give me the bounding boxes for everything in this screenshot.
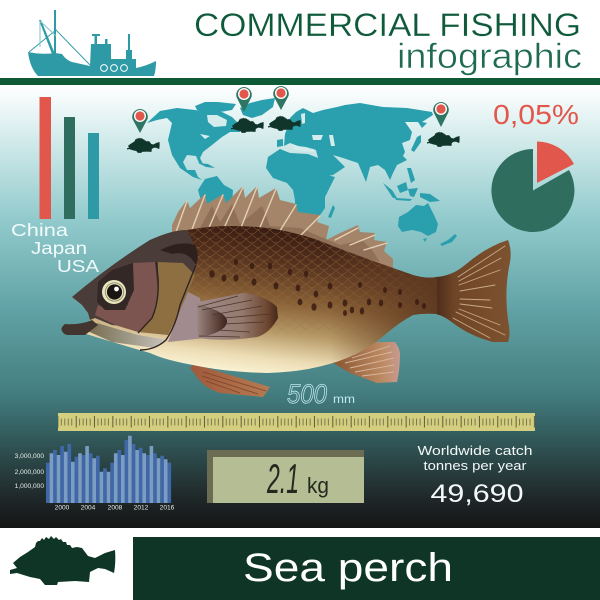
fish body [72,226,437,373]
Europe and Asia [284,103,433,182]
pie chart [491,142,574,232]
length label [287,379,355,409]
weighing scale display [207,450,364,503]
Japan [411,135,421,152]
opercle [138,262,195,335]
inland seas [200,113,335,152]
illustration: sea perch [61,186,511,397]
Southeast Asian islands [383,168,440,202]
year labels: 2000 [55,504,70,512]
axis values: 1,000,000 [15,483,44,490]
species name panel [133,537,600,600]
country labels [11,220,99,276]
axis values: 3,000,000 [15,453,44,460]
New Zealand [440,234,457,246]
tail fin [436,240,511,342]
ruler [58,413,535,431]
Japan bar [64,117,75,219]
scale pattern and spots [185,225,440,360]
world map [147,98,457,246]
gill lines [138,262,196,350]
catch statistics: tonnes per year [424,458,527,473]
country labels: China [11,220,68,240]
South America [198,176,233,225]
icon: fish silhouette [10,536,115,585]
anal fin [333,342,400,383]
year labels: 2012 [134,504,149,512]
axis values: 2,000,000 [15,469,44,476]
marker 3 [268,86,301,131]
weighing scale display: 2.1 [266,455,299,502]
Arctic islands and Greenland [195,98,275,118]
ventral fin [190,365,270,397]
lower jaw [83,323,168,348]
Africa [266,149,335,232]
header divider bar [0,78,600,85]
dorsal fin [172,186,393,268]
year labels: 2008 [108,504,123,512]
year labels: 2004 [81,504,96,512]
length label: mm [333,392,355,406]
species name panel: Sea perch [243,546,453,590]
subtitle: infographic [397,37,582,76]
catch statistics [418,443,532,508]
icon: fishing boat [28,10,156,76]
eye [102,280,126,304]
catch statistics: Worldwide catch [418,443,532,458]
Australia [398,203,438,242]
Cuba and Caribbean [198,163,215,168]
light bars [50,436,168,503]
British Isles [277,139,283,147]
Madagascar [328,205,335,218]
bar chart: top fishing nations [11,97,99,276]
weighing scale display: kg [307,473,329,498]
country labels: Japan [31,238,87,258]
dark bars [46,440,171,503]
country labels: USA [57,256,99,276]
axis values [15,453,44,490]
length label: 500 [287,379,327,409]
percentage label: 0,05% [493,99,579,130]
year labels [55,504,175,512]
head [61,230,205,350]
arc above opercle [160,243,198,265]
bar chart: annual catch [15,436,175,512]
China bar [40,97,51,219]
marker 4 [427,102,460,147]
catch statistics: 49,690 [430,480,524,508]
USA bar [88,133,99,219]
marker 1 [127,109,160,153]
eye patch [97,263,134,310]
marker 2 [231,87,264,133]
lower lip [61,320,98,335]
year labels: 2016 [160,504,175,512]
dark crown and snout [72,230,196,330]
pectoral fin [193,293,278,340]
North America [147,108,240,180]
cheek [95,262,158,332]
background gradient panel [0,85,600,528]
map markers with fish [127,86,460,153]
lower gill plate [168,292,205,342]
title: COMMERCIAL FISHING [194,7,581,43]
